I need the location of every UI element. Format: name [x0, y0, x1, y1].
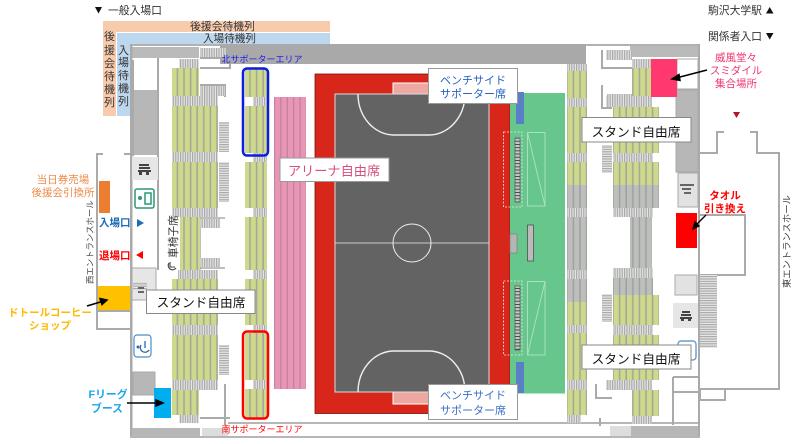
label: stand west	[146, 290, 255, 314]
coffee shop label: ドトールコーヒー	[8, 307, 92, 319]
south supporter area label: 南サポーターエリア	[221, 424, 303, 434]
label: stand east south: スタンド自由席	[592, 352, 681, 366]
Ifudodo gathering label: 威風堂々	[715, 51, 757, 64]
same-day ticket booth marker	[99, 181, 110, 213]
label: bench-side north	[428, 68, 518, 104]
north supporter area outline	[243, 68, 268, 156]
south supporter area outline	[243, 332, 268, 418]
label: bench-side south	[428, 384, 518, 420]
staff entrance label: 関係者入口	[708, 30, 762, 43]
Komazawa station label: 駒沢大学駅	[708, 3, 762, 17]
label: bench-side north: サポーター席	[440, 88, 506, 100]
same-day ticket label: 当日券売場	[37, 173, 90, 186]
queue: entrance waiting line: 列	[118, 95, 129, 108]
icon: stairs west	[133, 282, 147, 293]
futsal court	[315, 74, 510, 414]
west hall	[97, 154, 130, 329]
queue: entrance waiting line: 入場待機列	[203, 32, 256, 45]
queue: entrance waiting line: 機	[118, 82, 129, 95]
queue: supporters waiting line: 待	[104, 69, 115, 83]
arena free seating	[274, 97, 306, 389]
supporter column seating	[245, 68, 267, 418]
queue: supporters waiting line: 後援会待機列	[190, 19, 255, 33]
entrance label: 入場口	[99, 216, 130, 229]
queue: entrance waiting line: 場	[118, 56, 129, 69]
exit label	[99, 249, 143, 262]
queue: supporters waiting line: 機	[104, 83, 115, 96]
queue: entrance waiting line: 待	[118, 68, 129, 82]
F League booth label: Fリーグ	[88, 387, 128, 401]
north supporter area label: 北サポーターエリア	[221, 54, 303, 64]
queue: supporters waiting line: 会	[104, 57, 115, 70]
team bench area	[504, 92, 565, 394]
arrow: gathering point	[672, 70, 707, 80]
queue: supporters waiting line: 援	[104, 43, 115, 57]
general entrance label: 一般入場口	[108, 4, 162, 17]
wheelchair seat label: 車椅子席	[167, 215, 180, 258]
queue: supporters waiting line: 列	[104, 96, 115, 109]
F League booth label: ブース	[91, 401, 123, 415]
icon: toilet	[138, 164, 151, 175]
label: stand west: スタンド自由席	[157, 296, 246, 310]
west stand seating	[172, 59, 218, 423]
icon: toilet east	[680, 311, 692, 321]
dark red marker	[733, 112, 740, 118]
entrance label	[99, 216, 144, 229]
F League booth marker	[154, 388, 171, 418]
queue: supporters waiting line: 後	[104, 29, 115, 43]
queue: supporters waiting line	[103, 19, 330, 116]
towel exchange label: タオル	[709, 190, 741, 202]
label: arena free seats	[280, 158, 389, 182]
Ifudodo gathering label: スミダイル	[710, 64, 762, 77]
arrow: coffee shop	[87, 298, 107, 306]
Ifudodo gathering marker	[651, 59, 677, 97]
icon: east wheelchair sign	[678, 341, 696, 360]
east hall label: 東エントランスホール	[781, 195, 792, 288]
icon: wheelchair seat	[168, 262, 176, 270]
icon: stairs east	[680, 184, 694, 194]
east stand seating	[567, 59, 659, 424]
towel exchange label: 引き換え	[704, 202, 746, 215]
label: stand east north: スタンド自由席	[592, 126, 681, 140]
label: stand east north	[582, 118, 691, 142]
coffee shop marker	[98, 286, 130, 310]
coffee shop label: ショップ	[29, 320, 71, 332]
exit label: 退場口	[99, 249, 130, 262]
same-day ticket label: 後援会引換所	[32, 186, 95, 199]
queue: entrance waiting line	[117, 32, 330, 116]
label: stand east south	[582, 345, 691, 369]
icon: wheelchair sign	[134, 335, 151, 357]
arrow: F League booth	[127, 400, 163, 406]
label: arena free seats: アリーナ自由席	[288, 164, 380, 178]
arrow: towel exchange	[693, 215, 706, 229]
Ifudodo gathering label: 集合場所	[715, 77, 757, 90]
building structure	[130, 44, 700, 438]
icon: emergency green sign	[135, 189, 154, 208]
east hall	[700, 132, 779, 400]
towel exchange marker	[676, 213, 697, 248]
west hall label: 西エントランスホール	[85, 200, 95, 284]
label: bench-side south: サポーター席	[440, 404, 506, 417]
label: bench-side south: ベンチサイド	[440, 389, 506, 402]
queue: entrance waiting line: 入	[118, 45, 129, 57]
label: bench-side north: ベンチサイド	[440, 74, 506, 87]
